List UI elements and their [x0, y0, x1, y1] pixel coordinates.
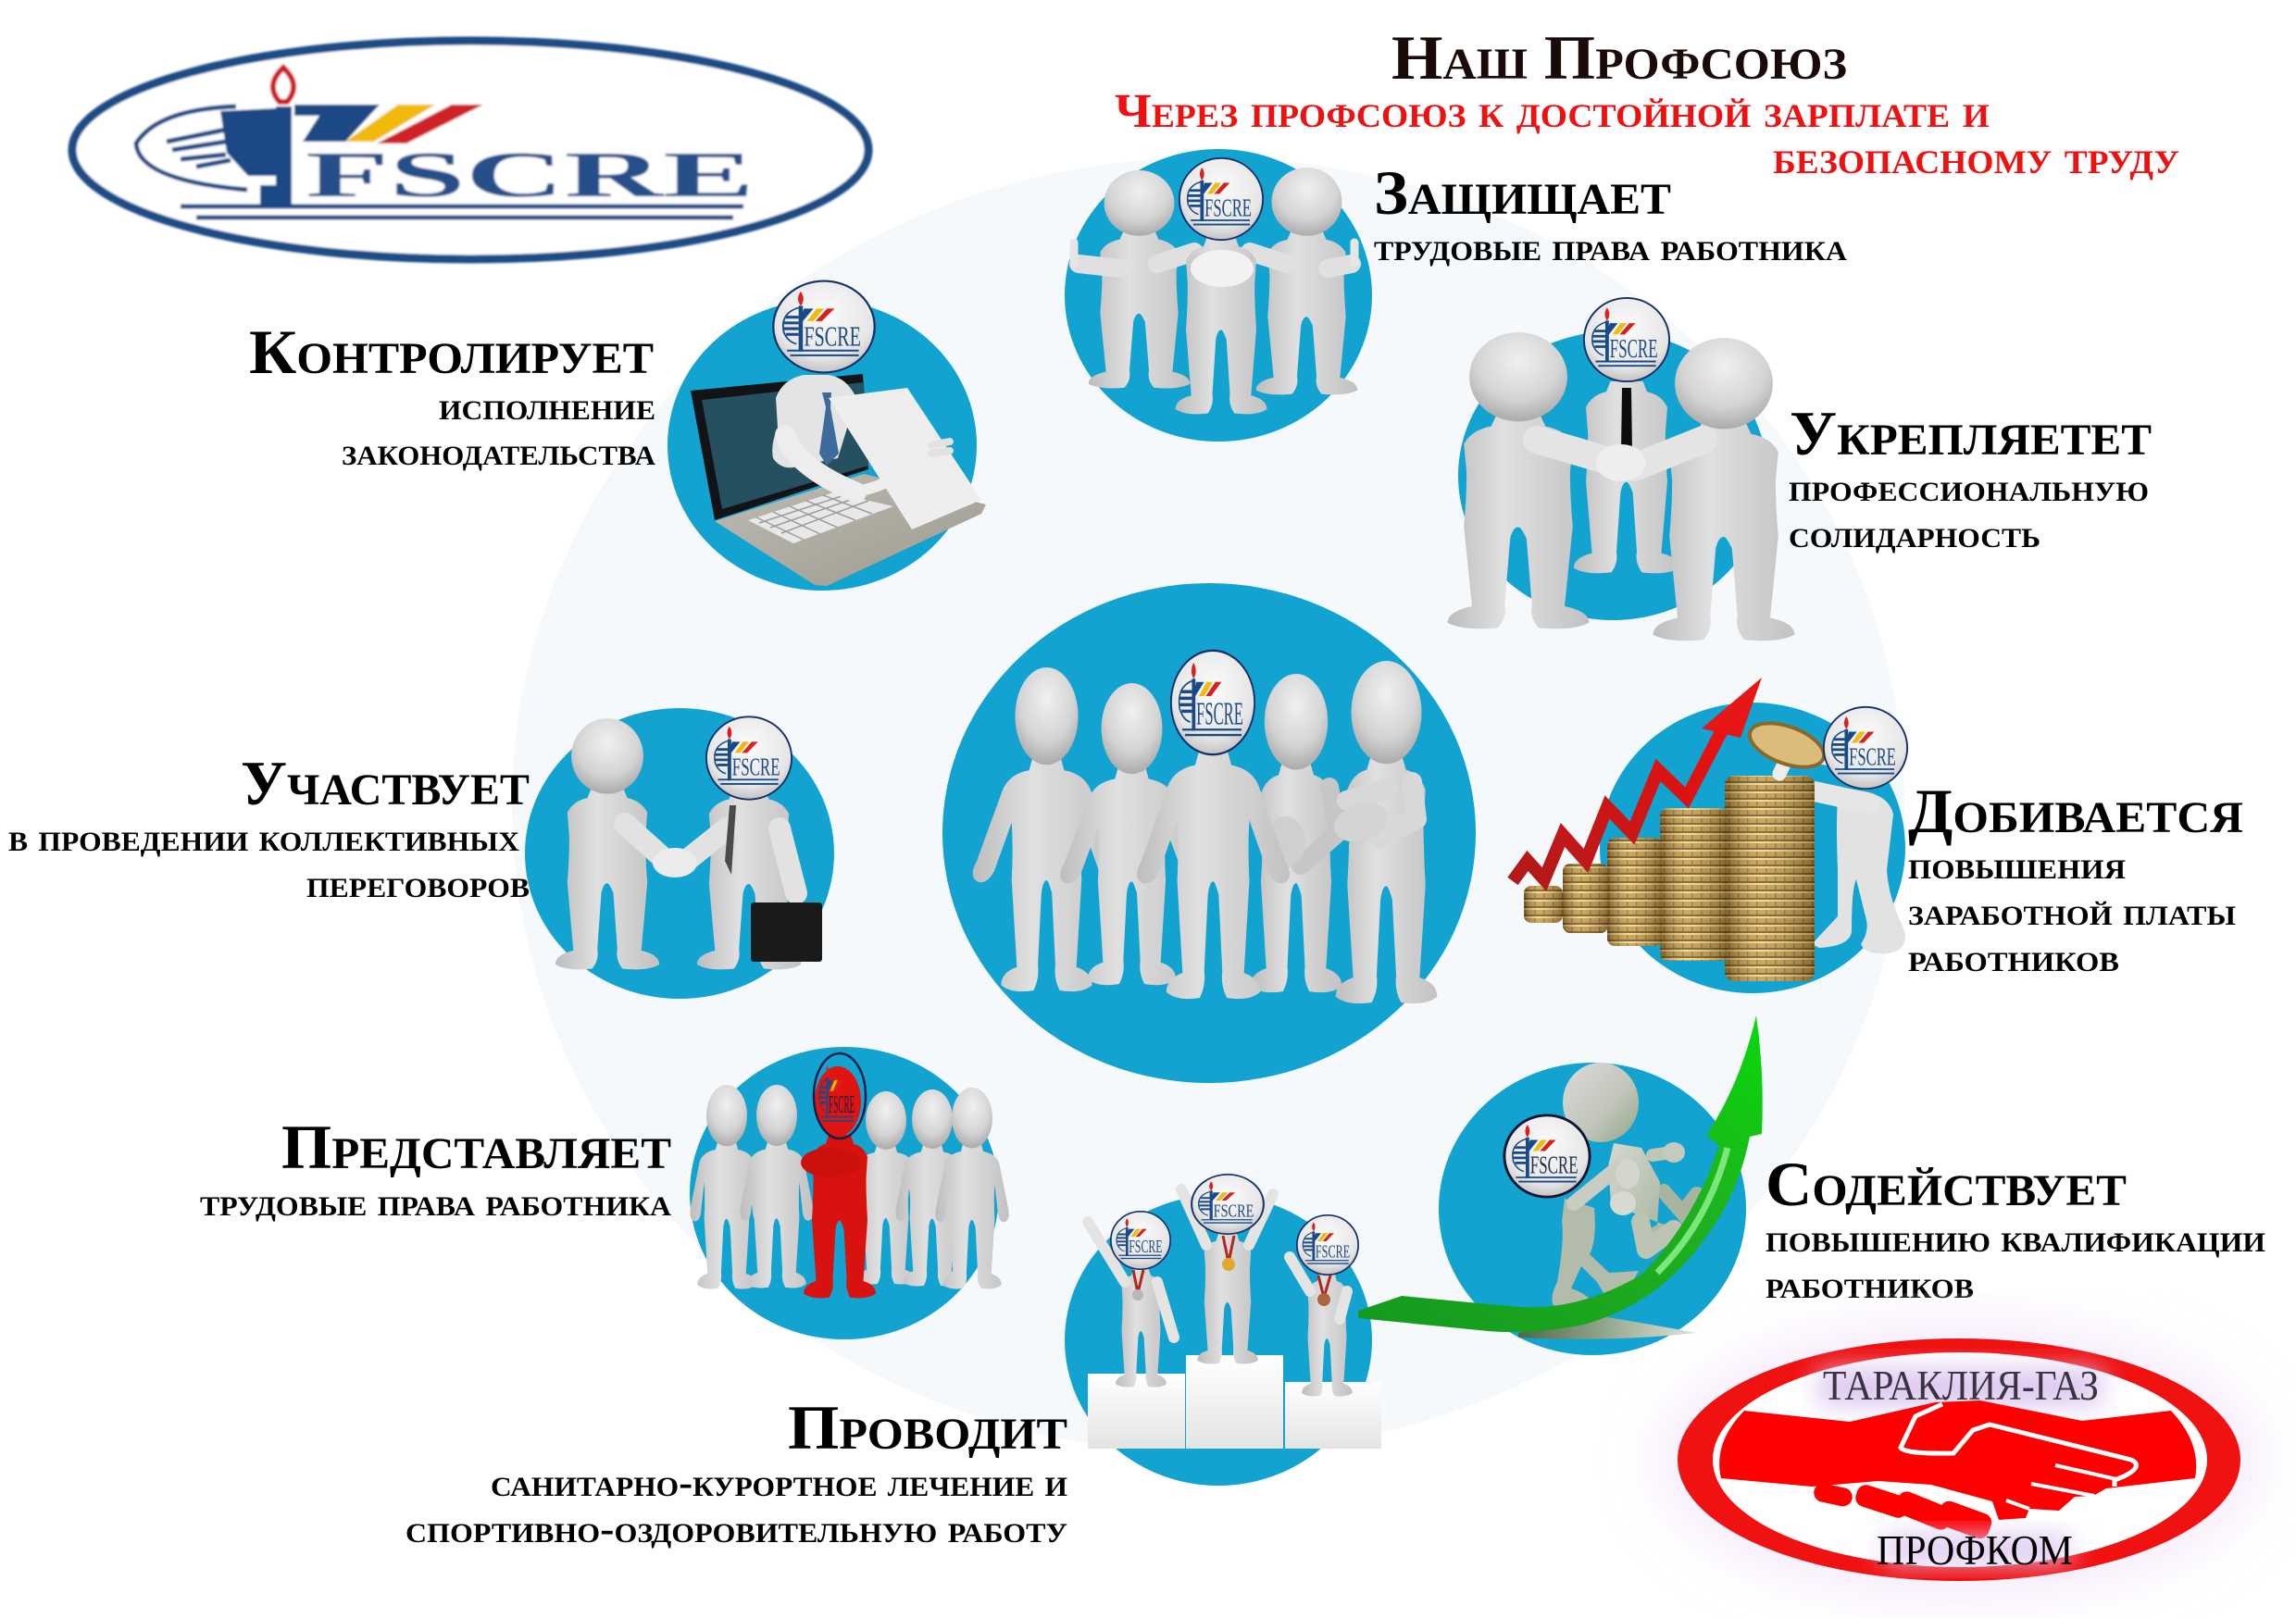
text: повышению квалификации	[1766, 1217, 2265, 1261]
medals	[1132, 1236, 1330, 1306]
front figure body	[1608, 1143, 1676, 1251]
red badge	[814, 1053, 866, 1139]
badge	[1171, 651, 1254, 754]
circle	[1439, 1063, 1746, 1355]
heading: контролирует: Контролирует	[249, 317, 654, 387]
heading: участвует: Участвует	[241, 748, 530, 818]
heading: содействует: Содействует	[1766, 1149, 2127, 1219]
badge	[1824, 707, 1907, 789]
heading: представляет: Представляет	[281, 1112, 671, 1182]
crossed arms	[1191, 250, 1254, 287]
badge	[773, 281, 875, 372]
background circle	[512, 157, 1904, 1453]
handshake	[1719, 1400, 2196, 1541]
badge right: FSCRE	[1316, 1242, 1350, 1262]
ring inner	[1713, 1352, 2207, 1567]
text: исполнение	[439, 385, 655, 429]
heading: защищает: Защищает	[1374, 157, 1671, 228]
back leg of front figure	[1664, 1191, 1697, 1213]
dangling hand	[1610, 1191, 1636, 1215]
badge: FSCRE	[1849, 743, 1896, 771]
keyboard	[748, 492, 893, 543]
heading: добивается: Добивается	[1908, 776, 2243, 846]
panel: добивается	[1513, 678, 1907, 993]
figure right	[1302, 1275, 1353, 1397]
slogan line 1: Через профсоюз к достойной зарплате и	[1115, 85, 1990, 138]
handshake	[1596, 444, 1646, 481]
text: санитарно-курортное лечение и	[491, 1462, 1067, 1505]
fist hand	[1663, 1142, 1685, 1163]
figure left	[1448, 332, 1589, 629]
badge	[1504, 1115, 1590, 1197]
text: переговоров	[306, 863, 530, 906]
badge: FSCRE	[804, 321, 861, 353]
hands	[1616, 1159, 1640, 1189]
figure 5 arms	[1347, 782, 1416, 838]
text: повышения	[1908, 844, 2126, 888]
handshake	[653, 848, 697, 877]
text: заработной платы	[1908, 890, 2236, 934]
coin	[1744, 715, 1829, 776]
figure left	[1089, 170, 1190, 388]
arms	[1079, 252, 1352, 268]
figure 2	[1060, 683, 1204, 985]
heading: укрепляет: Укрепляетет	[1790, 398, 2152, 468]
panel: защищает	[1065, 149, 1372, 442]
circle	[668, 300, 977, 591]
red badge: FSCRE	[829, 1090, 855, 1118]
thumbs	[1074, 243, 1354, 263]
figure 5	[1336, 661, 1437, 1003]
figure centre	[1197, 1234, 1258, 1364]
heading: проводит: Проводит	[788, 1392, 1067, 1462]
red arrow	[1513, 678, 1762, 881]
circle	[1600, 703, 1905, 993]
logo: FSCRE	[72, 41, 868, 259]
white figures	[690, 1085, 1009, 1288]
circle	[1065, 1195, 1372, 1486]
badge: FSCRE	[1530, 1151, 1578, 1179]
panel: центральная группа	[942, 583, 1476, 1083]
figure right	[1653, 338, 1794, 641]
front figure leg	[1641, 1222, 1674, 1250]
figure 4	[1251, 674, 1341, 992]
arms	[1088, 1189, 1347, 1338]
slogan line 2: безопасному труду	[1773, 131, 2179, 184]
text: трудовые права работника	[200, 1181, 671, 1225]
text: профессиональную	[1789, 467, 2149, 510]
coin stacks	[1524, 776, 1815, 981]
figure arm	[1815, 791, 1870, 803]
badge: FSCRE	[1196, 696, 1243, 731]
laptop screen	[691, 374, 868, 520]
holding fingers	[931, 442, 950, 454]
badge centre: FSCRE	[1214, 1200, 1254, 1221]
figure 4 arm	[1301, 787, 1338, 865]
ring	[1678, 1338, 2240, 1581]
red arms	[801, 1148, 860, 1177]
title: Наш Профсоюз	[1391, 22, 1847, 93]
arrow: green growth	[1358, 1015, 1763, 1332]
badge: укрепляет: FSCRE	[1610, 335, 1658, 364]
panel: проводит	[1065, 1175, 1381, 1486]
badge left	[1111, 1212, 1170, 1269]
text: работников	[1908, 937, 2119, 980]
figure right	[697, 790, 801, 969]
head	[1563, 1063, 1639, 1142]
figure right	[1256, 168, 1357, 394]
circle	[690, 1047, 999, 1339]
figure left	[1116, 1269, 1167, 1388]
text glow top	[1819, 1370, 2102, 1405]
arms	[1537, 440, 1703, 467]
figure 1	[973, 667, 1120, 991]
hand	[1779, 754, 1842, 774]
text top: ТАРАКЛИЯ-ГАЗ	[1823, 1363, 2099, 1409]
badge left: FSCRE	[1129, 1237, 1162, 1257]
circle	[1065, 149, 1372, 442]
badge: укрепляет	[1584, 298, 1669, 381]
badge right	[1297, 1215, 1358, 1275]
podium	[1088, 1355, 1381, 1449]
badge centre	[1192, 1175, 1264, 1234]
badge: FSCRE	[732, 753, 780, 781]
fist	[1653, 1152, 1672, 1155]
pointing hand	[856, 475, 903, 492]
arms	[625, 824, 796, 893]
figure 4 hand	[1265, 816, 1305, 868]
figure left	[555, 718, 659, 969]
figure torso	[772, 375, 856, 467]
text: в проведении коллективных	[8, 816, 519, 860]
circle	[1458, 331, 1767, 620]
figure 5 hand	[1329, 795, 1393, 849]
red figure	[804, 1135, 876, 1298]
figure centre	[1574, 381, 1679, 573]
text glow bottom	[1884, 1537, 2069, 1562]
halo	[1658, 1321, 2260, 1599]
badge: FSCRE	[1204, 194, 1252, 222]
tie	[725, 805, 736, 875]
badge	[706, 716, 792, 800]
briefcase	[751, 902, 822, 962]
panel: содействует	[1439, 1063, 1746, 1355]
text: солидарность	[1789, 513, 2040, 556]
tie	[1621, 388, 1632, 451]
text: трудовые права работника	[1374, 226, 1847, 269]
figure centre	[1176, 237, 1267, 414]
text: работников	[1766, 1263, 1974, 1307]
back figure arm	[1574, 1168, 1617, 1203]
circle	[525, 708, 834, 999]
text: законодательства	[342, 430, 655, 474]
paper	[829, 388, 981, 529]
back figure body	[1552, 1199, 1639, 1308]
panel: представляет	[690, 1047, 1009, 1339]
figure 3	[1137, 752, 1290, 999]
tie	[819, 392, 839, 466]
shadow	[1518, 1315, 1697, 1339]
panel: контролирует	[668, 281, 986, 591]
logo: FSCRE: FSCRE	[306, 140, 755, 211]
figure body	[1812, 790, 1905, 953]
circle	[942, 583, 1476, 1083]
panel: укрепляет	[1448, 331, 1794, 641]
text bottom: ПРОФКОМ	[1877, 1527, 2073, 1574]
badge	[1179, 158, 1263, 240]
arm	[785, 435, 856, 492]
laptop base	[715, 474, 986, 586]
text: спортивно-оздоровительную работу	[406, 1508, 1067, 1551]
panel: участвует	[525, 708, 834, 999]
logo: профком	[1658, 1321, 2260, 1599]
